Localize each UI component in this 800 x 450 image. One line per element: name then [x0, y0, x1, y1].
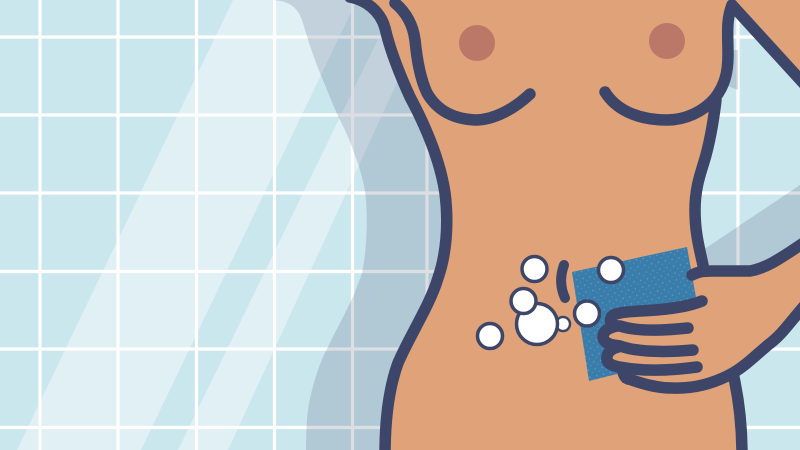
nipple right [649, 23, 685, 59]
right breast line [605, 5, 732, 120]
body skin [350, 0, 800, 450]
finger three [607, 347, 697, 370]
bubble top left [522, 256, 547, 282]
soap bubbles [478, 256, 624, 348]
bubble overlapping large bubble [511, 288, 536, 314]
large bubble [516, 304, 558, 344]
forearm upper line [692, 242, 800, 275]
body outline [350, 0, 800, 450]
body shadow on the wall [273, 0, 800, 450]
palm base [623, 372, 628, 379]
sponge [572, 247, 700, 381]
bubble far left [478, 324, 502, 348]
finger one [610, 301, 702, 330]
left breast line [395, 3, 530, 120]
forearm lower and palm line [626, 305, 800, 388]
bubble on sponge top [598, 258, 624, 282]
raised arm line [732, 5, 800, 85]
small bubble [556, 317, 570, 331]
window light stripes [17, 0, 435, 450]
right hip line [733, 373, 742, 450]
bubble on sponge edge [574, 301, 600, 326]
right torso outline [695, 100, 716, 270]
left torso outline [350, 0, 447, 450]
navel [561, 265, 565, 298]
finger two [603, 326, 693, 351]
hand skin over sponge [604, 290, 770, 390]
nipple left [459, 25, 495, 61]
